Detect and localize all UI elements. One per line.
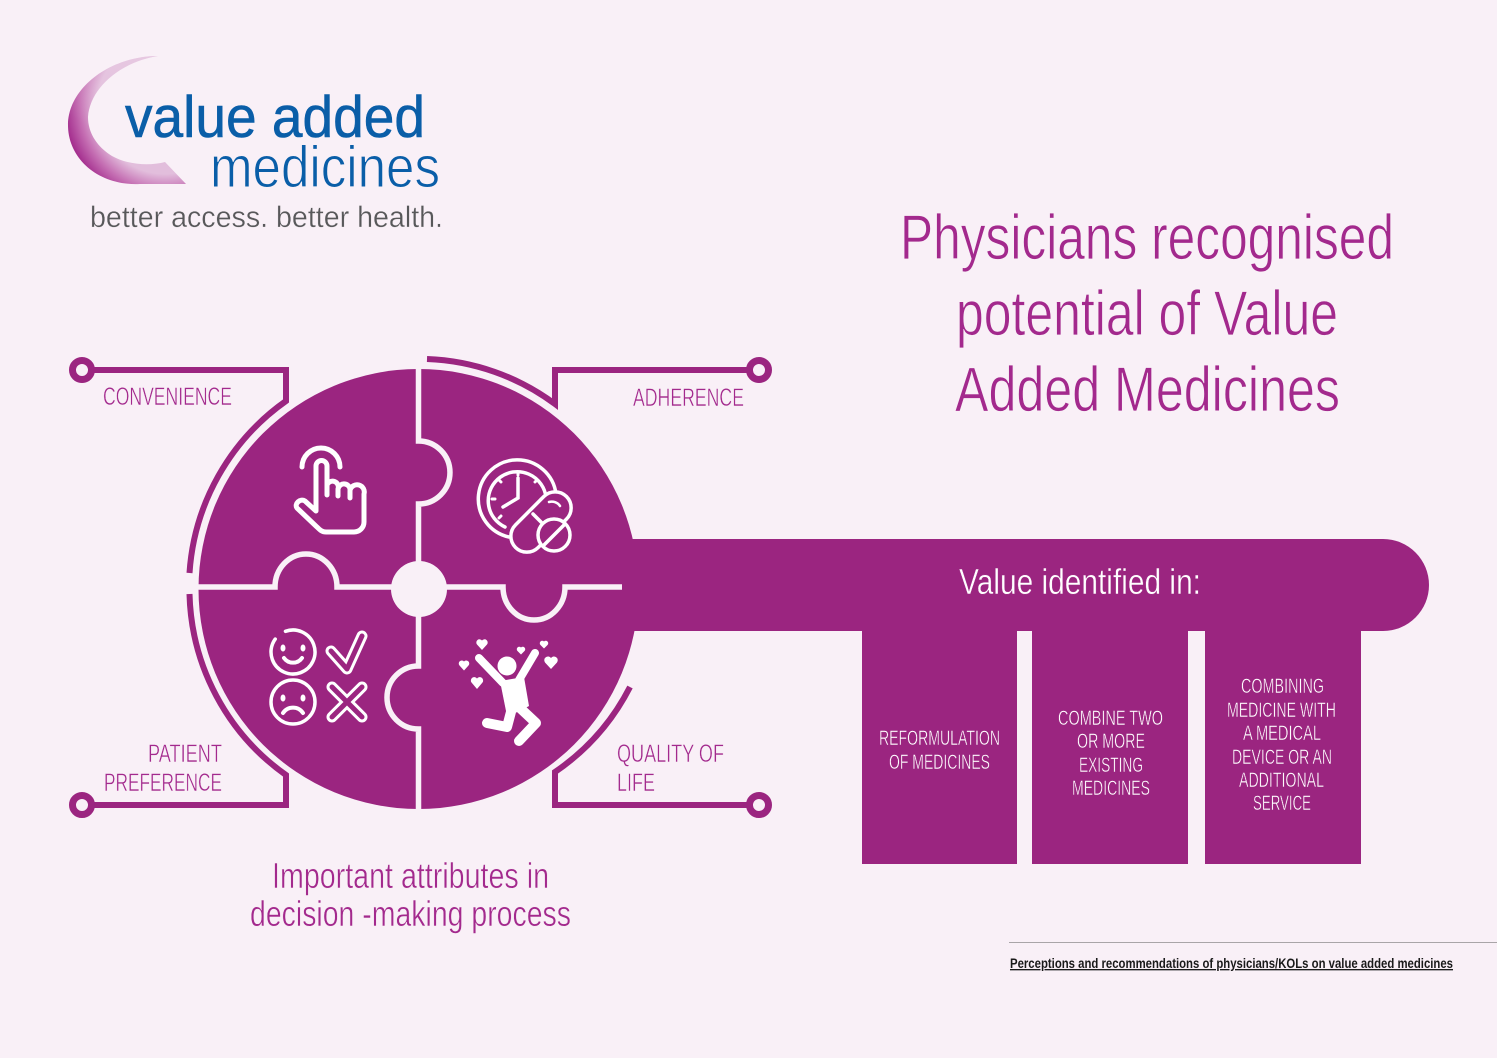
logo tagline: better access. better health. xyxy=(90,201,443,234)
icon: smiling and sad faces, tick and cross xyxy=(265,624,362,724)
bar heading: Value identified in: xyxy=(959,561,1201,602)
title xyxy=(900,203,1394,425)
icon: jumping person with hearts xyxy=(459,639,558,741)
logo crescent xyxy=(68,56,186,184)
tablet xyxy=(538,519,570,551)
subheading: important attributes: Important attributes in xyxy=(272,855,549,896)
panel: combining medicine with a medical device xyxy=(1205,630,1361,864)
sad face xyxy=(271,680,315,724)
connector: convenience xyxy=(72,360,286,573)
panel: combine two or more existing medicines: EXISTING xyxy=(1079,754,1143,777)
puzzle circle xyxy=(198,369,638,809)
panel: combine two or more existing medicines xyxy=(1032,630,1188,864)
connector: patient preference xyxy=(72,594,286,814)
label: patient preference: PATIENT xyxy=(148,740,222,768)
cross xyxy=(332,687,362,717)
smiley face xyxy=(265,624,321,680)
icon: pointing hand xyxy=(296,448,364,532)
title: potential of Value xyxy=(956,279,1338,349)
panel: combining medicine with a medical device: MEDICINE WITH xyxy=(1227,699,1336,722)
panel: reformulation of medicines xyxy=(862,630,1017,864)
connector: quality of life xyxy=(555,687,768,814)
panel: combining medicine with a medical device: SERVICE xyxy=(1253,792,1311,815)
puzzle centre xyxy=(391,561,447,617)
label: adherence: ADHERENCE xyxy=(633,384,744,412)
connector: adherence xyxy=(427,359,768,404)
panel: combine two or more existing medicines: OR MORE xyxy=(1077,730,1145,753)
title: Added Medicines xyxy=(955,355,1340,425)
subheading: important attributes xyxy=(250,855,571,934)
panel: combining medicine with a medical device: ADDITIONAL xyxy=(1239,769,1324,792)
logo wordmark line 1: value added xyxy=(125,85,425,150)
panel: combine two or more existing medicines: MEDICINES xyxy=(1072,777,1150,800)
subheading: important attributes: decision -making process xyxy=(250,893,571,934)
key shape: puzzle circle and bar xyxy=(195,365,1429,812)
panel: combining medicine with a medical device: A MEDICAL xyxy=(1243,722,1321,745)
label: quality of life: LIFE xyxy=(617,769,655,797)
logo wordmark line 2: medicines xyxy=(210,135,440,200)
panel: combining medicine with a medical device: COMBINING xyxy=(1241,675,1324,698)
label: patient preference xyxy=(104,740,222,797)
panel: reformulation of medicines: REFORMULATION xyxy=(879,727,1000,750)
logo: value added medicines xyxy=(68,56,443,234)
icon: clock and pills xyxy=(478,460,578,559)
label: quality of life: QUALITY OF xyxy=(617,740,724,768)
pill capsule xyxy=(504,485,578,559)
tick xyxy=(331,636,362,669)
label: quality of life xyxy=(617,740,724,797)
panel: combining medicine with a medical device: DEVICE OR AN xyxy=(1232,746,1332,769)
panel: reformulation of medicines: OF MEDICINES xyxy=(889,751,990,774)
puzzle seams xyxy=(195,365,622,812)
key bar xyxy=(620,539,1429,631)
label: convenience: CONVENIENCE xyxy=(103,383,232,411)
panel: combine two or more existing medicines: COMBINE TWO xyxy=(1058,707,1163,730)
label: patient preference: PREFERENCE xyxy=(104,769,222,797)
